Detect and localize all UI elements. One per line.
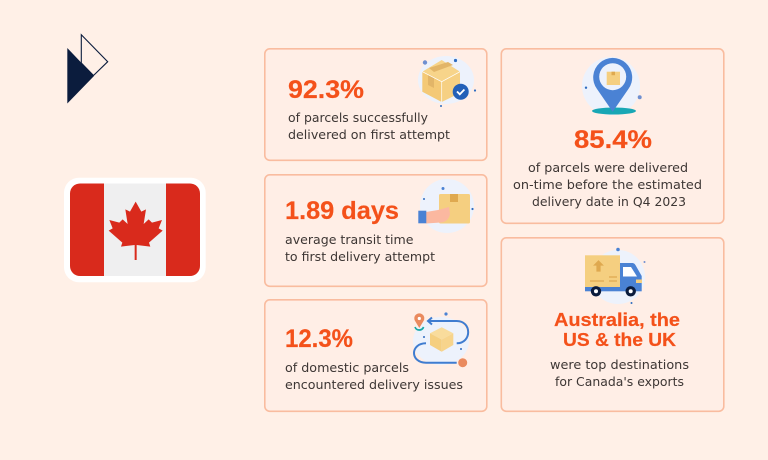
- description: of domestic parcels: [285, 360, 409, 375]
- panel: transit time: [265, 175, 487, 286]
- icon: location pin with parcel: [582, 57, 642, 115]
- description: to first delivery attempt: [285, 249, 435, 264]
- panel: first attempt delivery: [265, 49, 487, 160]
- heading: top destinations: [554, 309, 680, 350]
- heading: top destinations: Australia, the: [554, 309, 680, 330]
- description: average transit time: [285, 232, 414, 247]
- description: [285, 232, 435, 264]
- panel: top export destinations: [501, 238, 724, 411]
- icon: hand holding parcel: [418, 179, 474, 233]
- statistic: 1.89 days: 1.89 days: [285, 197, 399, 225]
- statistic: 92.3%: 92.3%: [288, 76, 364, 104]
- description: delivered on first attempt: [288, 127, 450, 142]
- description: of parcels were delivered: [528, 160, 688, 175]
- icon: parcel route: [413, 312, 469, 367]
- description: [550, 357, 689, 389]
- panel: on-time delivery: [501, 49, 724, 223]
- description: [513, 160, 702, 209]
- heading: top destinations: US & the UK: [563, 329, 677, 350]
- description: encountered delivery issues: [285, 377, 463, 392]
- panel: delivery issues: [265, 300, 487, 411]
- description: delivery date in Q4 2023: [532, 194, 686, 209]
- description: [285, 360, 463, 392]
- description: [288, 110, 450, 142]
- description: of parcels successfully: [288, 110, 429, 125]
- statistic: 85.4%: 85.4%: [574, 126, 652, 154]
- icon: Canadian flag: [64, 178, 206, 282]
- icon: parcel with check badge: [418, 56, 476, 107]
- logo: [67, 35, 108, 104]
- icon: delivery truck: [585, 248, 646, 304]
- description: on-time before the estimated: [513, 177, 702, 192]
- description: were top destinations: [550, 357, 689, 372]
- statistic: 12.3%: 12.3%: [285, 325, 353, 353]
- description: for Canada's exports: [555, 374, 684, 389]
